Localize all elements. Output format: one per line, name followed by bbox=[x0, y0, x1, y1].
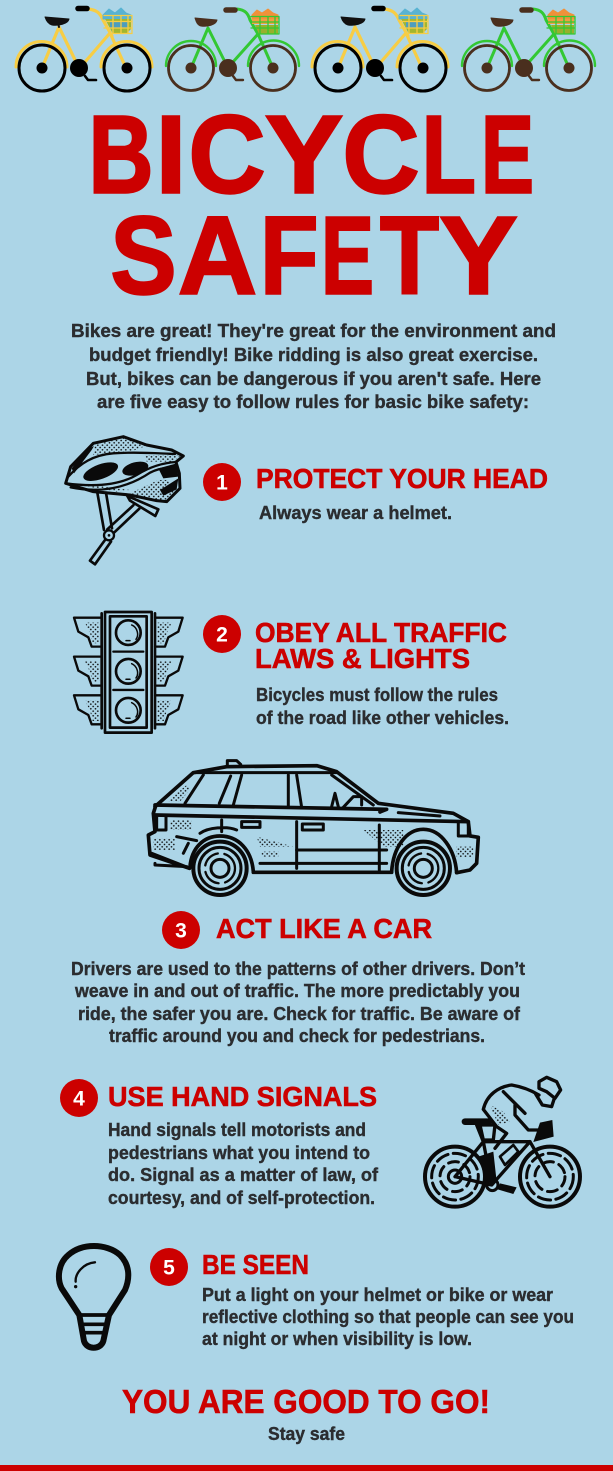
rule 4: do. Signal as a matter of law, of bbox=[108, 1165, 379, 1185]
title: C bbox=[188, 93, 266, 216]
rule 3: ACT LIKE A CAR bbox=[216, 913, 432, 944]
closing heading: YOU ARE GOOD TO GO! bbox=[122, 1383, 490, 1420]
rule 2 bbox=[203, 615, 509, 728]
rule 1: Always wear a helmet. bbox=[259, 503, 452, 523]
title: S bbox=[110, 194, 176, 317]
rule 4: courtesy, and of self-protection. bbox=[108, 1188, 375, 1208]
icon: green bicycle 4 bbox=[462, 9, 595, 90]
rule 5: BE SEEN bbox=[202, 1249, 309, 1280]
rule 3 bbox=[71, 911, 525, 1046]
rule 4: pedestrians what you intend to bbox=[108, 1143, 370, 1163]
rule 5: Put a light on your helmet or bike or wear bbox=[202, 1285, 553, 1305]
title: E bbox=[481, 93, 534, 216]
rule 3: traffic around you and check for pedestrians. bbox=[109, 1026, 485, 1046]
title: F bbox=[260, 194, 318, 317]
icon: light bulb bbox=[59, 1246, 128, 1348]
rule 5: 5 bbox=[163, 1256, 175, 1280]
rule 1: 1 bbox=[216, 472, 228, 494]
rule 2: 2 bbox=[216, 624, 228, 646]
rule 1 bbox=[203, 463, 548, 523]
rule 3: 3 bbox=[175, 920, 187, 942]
rule 3: weave in and out of traffic. The more predictably you bbox=[74, 981, 520, 1001]
title: E bbox=[321, 194, 374, 317]
intro paragraph: are five easy to follow rules for basic bike safety: bbox=[97, 392, 529, 412]
icon: yellow bicycle 3 bbox=[312, 8, 448, 91]
rule 5: reflective clothing so that people can see you bbox=[202, 1307, 574, 1327]
title: B bbox=[88, 93, 154, 216]
icon: cyclist bbox=[425, 1077, 580, 1207]
rule 4: Hand signals tell motorists and bbox=[108, 1120, 366, 1140]
title: Y bbox=[265, 93, 343, 216]
title: I bbox=[156, 93, 186, 216]
rule 3: Drivers are used to the patterns of other drivers. Don’t bbox=[71, 959, 525, 979]
bottom red band bbox=[0, 1465, 613, 1471]
closing note: Stay safe bbox=[268, 1424, 345, 1444]
title: A bbox=[178, 194, 257, 317]
title: Y bbox=[440, 194, 518, 317]
icon: green bicycle 2 bbox=[166, 9, 299, 90]
rule 2: Bicycles must follow the rules bbox=[256, 685, 498, 705]
icon: yellow bicycle 1 bbox=[16, 8, 152, 91]
rule 1: PROTECT YOUR HEAD bbox=[256, 463, 548, 494]
icon: car bbox=[148, 761, 478, 895]
intro paragraph: budget friendly! Bike ridding is also great exercise. bbox=[89, 345, 538, 365]
title: L bbox=[422, 93, 476, 216]
icon: traffic light bbox=[74, 612, 183, 733]
rule 2: OBEY ALL TRAFFIC bbox=[255, 617, 507, 648]
rule 4 bbox=[60, 1079, 379, 1208]
intro paragraph bbox=[71, 321, 556, 412]
intro paragraph: But, bikes can be dangerous if you aren't safe. Here bbox=[86, 369, 541, 389]
intro paragraph: Bikes are great! They're great for the environment and bbox=[71, 321, 556, 341]
rule 5: at night or when visibility is low. bbox=[202, 1329, 472, 1349]
rule 3: ride, the safer you are. Check for traffic. Be aware of bbox=[78, 1004, 521, 1024]
rule 2: LAWS & LIGHTS bbox=[255, 643, 470, 674]
title bbox=[88, 93, 534, 317]
rule 2: of the road like other vehicles. bbox=[256, 708, 509, 728]
icon: helmet bbox=[66, 437, 183, 564]
rule 4: 4 bbox=[73, 1088, 85, 1110]
rule 4: USE HAND SIGNALS bbox=[108, 1081, 377, 1112]
title: C bbox=[342, 93, 420, 216]
title: T bbox=[380, 194, 439, 317]
rule 5 bbox=[150, 1248, 574, 1349]
